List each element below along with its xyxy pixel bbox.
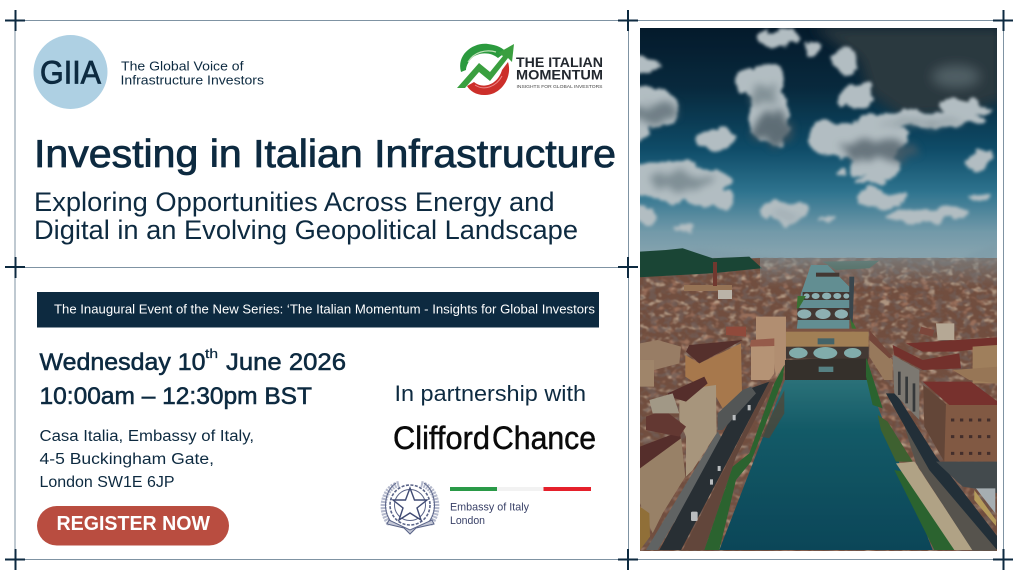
venue address: Casa Italia, Embassy of Italy, xyxy=(40,428,254,445)
banner: The Inaugural Event of the New Series: ‘The Italian Momentum - Insights for Global Investors xyxy=(54,302,595,316)
register button: REGISTER NOW xyxy=(56,513,210,535)
upstream river and bridges xyxy=(797,265,857,330)
event date: th xyxy=(205,346,218,361)
lower river scene drawn in photo-crop coordinates xyxy=(640,265,998,551)
The Italian Momentum logo xyxy=(457,44,603,95)
event date: Wednesday 10 xyxy=(40,349,206,376)
church and tower xyxy=(684,262,732,299)
subtitle xyxy=(34,187,578,245)
main river xyxy=(719,380,933,550)
GIIA tagline: The Global Voice of xyxy=(121,58,244,74)
The Italian Momentum logo: MOMENTUM xyxy=(516,68,603,82)
dark storm cloud xyxy=(813,27,1003,117)
event date xyxy=(40,346,346,376)
subtitle: Exploring Opportunities Across Energy and xyxy=(34,187,554,217)
right bank buildings xyxy=(869,323,998,526)
The Italian Momentum logo: INSIGHTS FOR GLOBAL INVESTORS xyxy=(516,84,602,89)
Clifford Chance logo: Chance xyxy=(492,420,596,456)
Embassy of Italy label: Embassy of Italy xyxy=(450,502,529,514)
Embassy of Italy label: London xyxy=(450,515,485,527)
parked cars xyxy=(691,405,751,521)
river banks xyxy=(704,357,998,551)
left bank buildings xyxy=(640,317,786,550)
Embassy of Italy emblem xyxy=(384,483,436,534)
GIIA logo xyxy=(34,35,108,109)
banner xyxy=(37,292,599,328)
Clifford Chance logo xyxy=(393,420,596,456)
GIIA logo: GIIA xyxy=(40,54,102,90)
partnership heading: In partnership with xyxy=(394,381,586,406)
green hill xyxy=(640,248,879,277)
roof texture xyxy=(640,258,997,552)
GIIA tagline: Infrastructure Investors xyxy=(120,72,265,88)
reflection under the bridge xyxy=(785,357,868,380)
event time: 10:00am – 12:30pm BST xyxy=(40,383,312,410)
white clouds xyxy=(618,30,992,231)
Embassy of Italy tricolour bar xyxy=(450,487,591,491)
logo icon: green and red arrow swirl xyxy=(457,44,514,95)
event date: June 2026 xyxy=(226,349,346,376)
distant haze hills xyxy=(640,243,997,265)
cloud shading xyxy=(628,83,963,219)
title: Investing in Italian Infrastructure xyxy=(34,133,616,176)
Clifford Chance logo: Clifford xyxy=(393,420,490,456)
GIIA tagline xyxy=(120,58,265,88)
left riverside road xyxy=(646,382,774,550)
Ponte Vecchio xyxy=(786,329,869,359)
register button xyxy=(37,506,229,546)
venue address: London SW1E 6JP xyxy=(40,474,174,491)
sky xyxy=(640,28,997,268)
Embassy of Italy label xyxy=(450,502,529,527)
city base xyxy=(640,258,997,552)
horizon mist xyxy=(760,258,997,284)
photo: aerial view of Florence and the Arno xyxy=(618,27,1003,552)
colour grade overlay xyxy=(640,28,997,551)
logo wordmark: THE ITALIAN xyxy=(516,55,603,70)
venue address: 4-5 Buckingham Gate, xyxy=(40,451,214,468)
subtitle: Digital in an Evolving Geopolitical Landscape xyxy=(34,215,578,245)
venue address xyxy=(40,428,254,491)
